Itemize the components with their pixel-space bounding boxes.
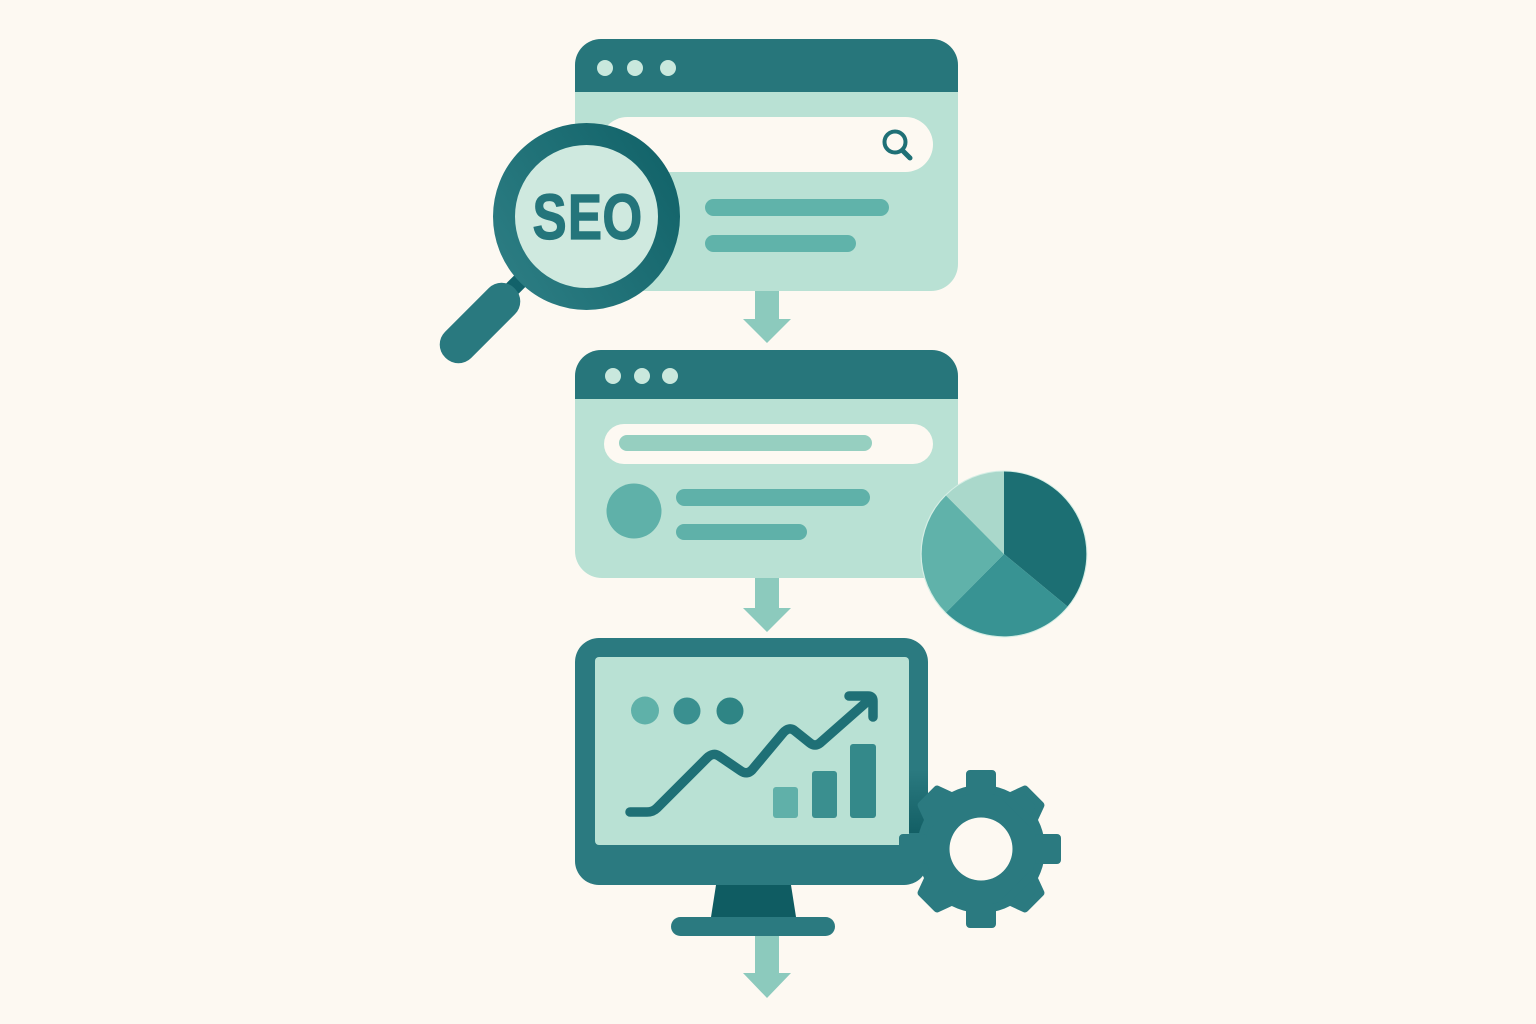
line chart with rising arrow [630, 696, 873, 812]
content line one [676, 489, 870, 506]
search bar [600, 117, 933, 172]
result line two [705, 235, 856, 252]
SEO label: SEO [532, 183, 642, 253]
bar chart [773, 744, 876, 818]
result line one [705, 199, 889, 216]
arrow: reporting output [743, 936, 791, 998]
monitor stand [711, 885, 796, 917]
icon: gear [903, 774, 1057, 924]
panel: analysis browser window [575, 350, 958, 578]
pie chart [920, 470, 1088, 638]
address text placeholder [619, 435, 872, 451]
monitor frame shadow near gear [909, 770, 928, 833]
status dots [631, 696, 744, 724]
panel: monitor dashboard [575, 638, 928, 936]
icon: SEO magnifying glass [432, 134, 669, 371]
icon: small search magnifier [884, 132, 910, 158]
panel: search browser window [575, 39, 958, 291]
monitor base [671, 917, 835, 936]
monitor frame [575, 638, 928, 885]
avatar circle [606, 484, 662, 538]
arrow: search to analysis [743, 291, 791, 343]
monitor screen [595, 657, 909, 845]
content line two [676, 524, 807, 540]
arrow: analysis to reporting [743, 578, 791, 632]
address bar [604, 424, 933, 464]
